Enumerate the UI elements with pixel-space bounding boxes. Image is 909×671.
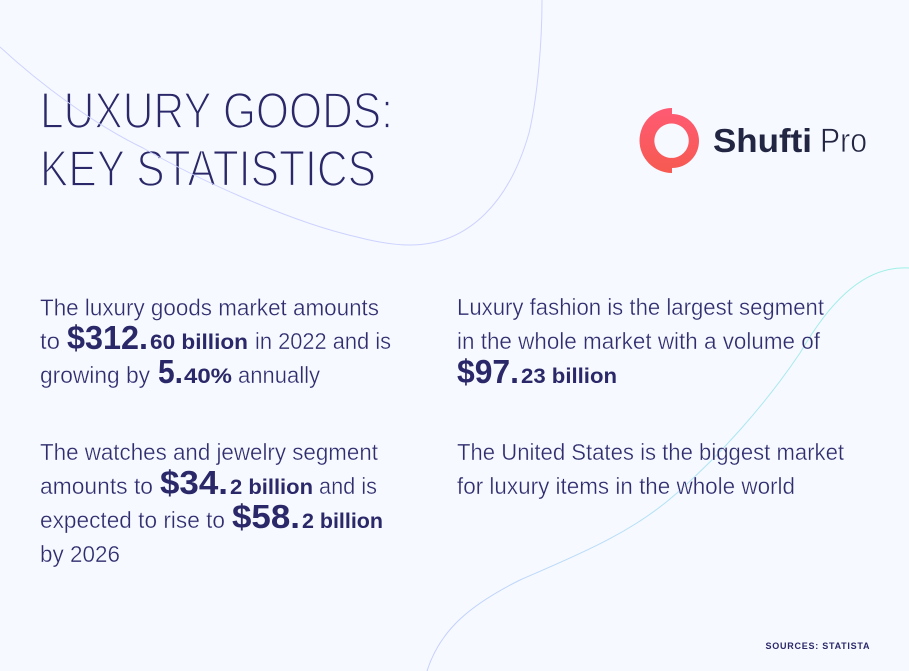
stat: United States: for luxury items in the whole world: [457, 473, 795, 499]
logo: Shufti Pro: [640, 108, 867, 173]
icon: ring mark: [640, 108, 699, 173]
stat: luxury goods market: growing by: [40, 362, 150, 388]
stat: United States: The United States is the biggest market: [457, 439, 845, 465]
stat: luxury goods market: [40, 294, 391, 390]
stat: luxury fashion: [457, 294, 825, 390]
stat: luxury goods market: to: [40, 328, 60, 354]
stat: luxury fashion: $97.: [457, 353, 519, 390]
title: KEY STATISTICS: [40, 140, 376, 197]
source note: SOURCES: STATISTA: [766, 641, 870, 651]
title: [40, 82, 393, 197]
stat: United States: [457, 439, 845, 499]
stat: watches and jewelry: $34.: [160, 464, 228, 501]
stat: watches and jewelry: [40, 439, 383, 567]
stat: watches and jewelry: $58.: [232, 498, 300, 535]
stat: luxury goods market: $312.: [67, 319, 148, 356]
stat: luxury goods market: 60 billion: [150, 331, 248, 354]
stat: watches and jewelry: by 2026: [40, 541, 120, 567]
stat: luxury fashion: Luxury fashion is the largest segment: [457, 294, 825, 320]
logo wordmark: Pro: [820, 122, 867, 160]
decorative curve: purple: [0, 0, 542, 245]
decorative curve: teal: [427, 268, 909, 671]
stat: luxury fashion: in the whole market with a volume of: [457, 328, 821, 354]
stat: watches and jewelry: 2 billion: [230, 476, 313, 499]
stat: watches and jewelry: amounts to: [40, 473, 153, 499]
stat: watches and jewelry: 2 billion: [302, 510, 383, 533]
stat: luxury goods market: 5.: [158, 353, 183, 390]
stat: luxury goods market: The luxury goods market amounts: [40, 294, 379, 320]
logo wordmark: [713, 122, 867, 160]
stat: luxury goods market: annually: [238, 362, 320, 388]
stat: luxury goods market: in 2022 and is: [255, 328, 391, 354]
stat: luxury goods market: 40%: [184, 365, 232, 388]
stat: watches and jewelry: and is: [319, 473, 377, 499]
title: LUXURY GOODS:: [40, 82, 393, 139]
stat: watches and jewelry: The watches and jewelry segment: [40, 439, 379, 465]
logo wordmark: Shufti: [713, 122, 812, 159]
stat: watches and jewelry: expected to rise to: [40, 507, 225, 533]
stat: luxury fashion: 23 billion: [521, 365, 617, 388]
